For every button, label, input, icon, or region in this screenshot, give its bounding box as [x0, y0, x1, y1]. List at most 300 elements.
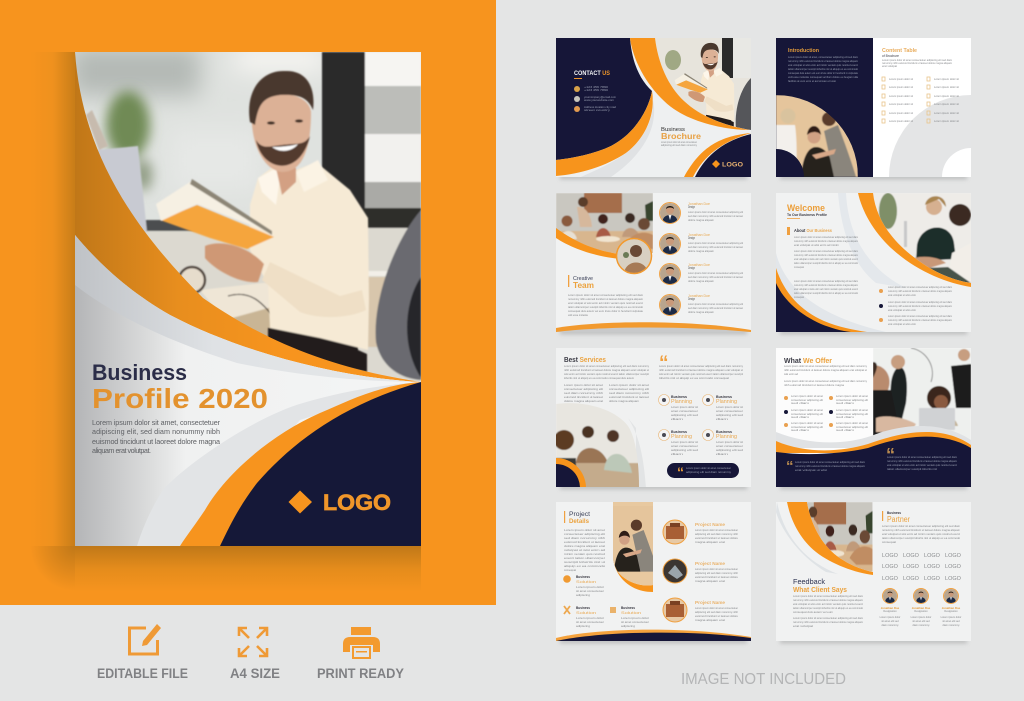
- welcome bullets: [879, 286, 952, 326]
- services grid: Planning: [716, 399, 737, 405]
- feedback text: Feedback: [793, 577, 825, 586]
- spread 3: creative team: [556, 193, 751, 335]
- feature: editable file: [97, 624, 188, 681]
- services grid: amet consectetuer: [671, 445, 698, 448]
- business partner text: consequat: [882, 541, 896, 544]
- offer bullets: Lorem ipsum dolor sit amet: [791, 395, 823, 398]
- client portraits: Designation: [883, 610, 897, 613]
- business partner text: Lorem ipsum dolor sit amet consectetuer adipiscing elit sed diam: [882, 525, 960, 528]
- quote pill: Lorem ipsum dolor sit amet consectetuer: [686, 467, 731, 470]
- navy right quote: erat volutpat ut wisi enim ad minim veniam quis nostrud exerci: [887, 464, 957, 467]
- business solution items: sit amet consectetuer: [576, 621, 604, 624]
- services grid: adipiscing elit sed: [671, 414, 699, 417]
- content table: Lorem ipsum dolor sit: [889, 103, 913, 106]
- welcome text: nonummy nibh euismod tincidunt ut laoreet dolore magna aliquam: [794, 284, 858, 287]
- project details heading: minim veniam quis nostrud: [564, 553, 606, 556]
- cover description: adipiscing elit, sed diam nonummy nibh: [92, 427, 220, 436]
- grey ring: [889, 95, 971, 177]
- cover description: euismod tincidunt ut laoreet dolore magna: [92, 437, 220, 446]
- mini bottom band: [556, 630, 751, 641]
- spread 8: feedback and partners: [776, 502, 971, 643]
- feedback text: [793, 577, 864, 628]
- spread 1: contact and brochure cover: [556, 38, 751, 179]
- project circles: Project Name: [695, 561, 726, 566]
- team members: dolore magna aliquam: [688, 311, 714, 314]
- project circles: Lorem ipsum dolor sit amet consectetuer: [695, 529, 738, 532]
- lower grey swoosh: [137, 382, 421, 546]
- content table: Lorem ipsum dolor sit: [934, 112, 959, 115]
- offer bullets: consectetuer adipiscing elit: [836, 413, 868, 416]
- mini photo: group at laptop: [873, 348, 971, 448]
- business solution items: sit amet consectetuer: [576, 590, 604, 593]
- business solution items: Business: [621, 606, 635, 610]
- services grid: Planning: [716, 434, 737, 440]
- offer bullets: Lorem ipsum dolor sit amet: [836, 395, 868, 398]
- welcome text: consequat: [794, 296, 804, 299]
- what we offer copy: nibh euismod tincidunt ut laoreet dolore magna aliquam erat volutpat ut: [784, 369, 867, 372]
- services grid: Lorem ipsum dolor sit: [716, 406, 743, 409]
- creative team heading: Lorem ipsum dolor sit amet consectetuer adipiscing elit sed diam: [568, 294, 643, 297]
- project circles: magna aliquam erat: [695, 541, 725, 544]
- business solution items: adipiscing: [621, 625, 636, 628]
- services grid: diam: [671, 453, 683, 456]
- offer bullets: sed diam: [836, 402, 854, 405]
- quote and right copy: “: [659, 353, 668, 374]
- partner logos grid: LOGO: [882, 564, 899, 570]
- welcome text: [787, 203, 859, 299]
- cover heading: Profile 2020: Profile 2020: [92, 383, 268, 414]
- best services copy: dolore magna aliquam: [609, 400, 639, 403]
- navy right quote: tation ullamcorper suscipit lobortis nisl: [887, 468, 938, 471]
- team members: Jonathan Doe: [688, 202, 710, 206]
- feedback text: Lorem ipsum dolor sit amet consectetuer adipiscing elit sed diam: [793, 617, 863, 620]
- client portraits: [880, 588, 962, 627]
- creative team heading: Creative: [573, 276, 593, 282]
- offer bullets: Lorem ipsum dolor sit amet: [836, 409, 868, 412]
- client portraits: sit amet elit sed: [942, 620, 960, 623]
- welcome text: To Our Business Profile: [787, 213, 827, 217]
- creative team heading: erat volutpat ut wisi enim ad minim veniam quis nostrud exerci: [568, 302, 643, 305]
- services grid: adipiscing elit sed: [716, 449, 744, 452]
- feedback text: consequat duis autem vel eum: [793, 611, 833, 614]
- project details heading: volutpat ut wisi enim ad: [564, 549, 606, 552]
- introduction text: consequat duis autem vel eum iriure dolor in hendrerit in vulputate: [788, 72, 859, 75]
- content table: of Brochure: [882, 54, 899, 58]
- offer bullets: sed diam: [791, 429, 809, 432]
- business solution items: Business: [576, 575, 590, 579]
- team members: sed diam nonummy nibh euismod tincidunt ut laoreet: [688, 215, 743, 218]
- mini navy corner: [556, 458, 586, 487]
- business solution items: sit amet consectetuer: [621, 621, 649, 624]
- contact text: street country: [584, 109, 611, 112]
- business solution items: Lorem ipsum dolor: [621, 617, 649, 620]
- feedback text: erat volutpat: [793, 625, 813, 628]
- services grid: amet consectetuer: [716, 445, 743, 448]
- best services copy: euismod tincidunt ut laoreet: [564, 396, 603, 399]
- mini orange band: [787, 502, 873, 575]
- creative team heading: [568, 275, 644, 317]
- mini bottom band: [556, 322, 751, 332]
- introduction text: [788, 48, 859, 83]
- cover logo: [288, 490, 391, 515]
- content table: Lorem ipsum dolor sit: [889, 86, 913, 89]
- quote and right copy: lobortis nisl ut aliquip ex ea commodo consequat: [659, 377, 729, 380]
- quote and right copy: wisi enim ad minim veniam quis nostrud exerci tation ullamcorper suscipit: [659, 373, 743, 376]
- business partner text: Business: [887, 511, 901, 515]
- content table: Lorem ipsum dolor sit: [889, 78, 913, 81]
- services grid: Planning: [671, 434, 692, 440]
- cover photo: man reading a book: [70, 46, 421, 393]
- creative team heading: velit esse molestie: [568, 314, 589, 317]
- partner logos grid: LOGO: [924, 564, 941, 570]
- team members: Design: [688, 205, 695, 209]
- offer bullets: consectetuer adipiscing elit: [836, 399, 868, 402]
- project circles: euismod tincidunt ut laoreet dolore: [695, 537, 739, 540]
- feature: print ready: [317, 627, 404, 681]
- best services copy: wisi enim ad minim veniam quis nostrud exerci tation ullamcorper suscipit: [564, 373, 649, 376]
- mini navy area: [556, 38, 652, 160]
- mini title: Brochure: [661, 132, 702, 141]
- project circles: [663, 520, 739, 622]
- navy left quote: nonummy nibh euismod tincidunt ut laoreet dolore magna aliquam: [795, 465, 865, 468]
- client portraits: Lorem ipsum dolor: [911, 616, 932, 619]
- best services copy: nibh euismod tincidunt ut laoreet dolore magna aliquam erat volutpat ut: [564, 369, 649, 372]
- mini pale swoosh: [838, 193, 906, 288]
- services grid: diam: [671, 418, 683, 421]
- navy right quote: Lorem ipsum dolor sit amet consectetuer adipiscing elit sed diam: [887, 456, 957, 459]
- offer bullets: sed diam: [791, 416, 809, 419]
- welcome text: Lorem ipsum dolor sit amet consectetuer adipiscing elit sed diam: [794, 250, 858, 253]
- welcome text: erat volutpat ut wisi enim ad minim veniam quis nostrud exerci: [794, 258, 858, 261]
- partner logos grid: LOGO: [945, 576, 962, 582]
- services grid: Business: [716, 395, 732, 399]
- team members: sed diam nonummy nibh euismod tincidunt ut laoreet: [688, 276, 743, 279]
- creative team heading: Team: [573, 281, 594, 290]
- cover description: aliquam erat volutpat.: [92, 446, 151, 455]
- quote and right copy: Lorem ipsum dolor sit amet consectetuer adipiscing elit sed diam nonummy: [659, 365, 744, 368]
- content table: Lorem ipsum dolor sit: [934, 86, 959, 89]
- feedback text: nonummy nibh euismod tincidunt ut laoreet dolore magna aliquam: [793, 621, 863, 624]
- project details heading: consequat: [564, 569, 576, 572]
- services grid: adipiscing elit sed: [716, 414, 744, 417]
- quote pill: “: [677, 464, 684, 480]
- project details heading: aliquip ex ea commodo: [564, 565, 606, 568]
- business solution items: Solution: [576, 579, 596, 584]
- offer bullets: Lorem ipsum dolor sit amet: [791, 422, 823, 425]
- offer bullets: sed diam: [836, 416, 854, 419]
- navy circle: [776, 149, 804, 177]
- team members: Lorem ipsum dolor sit amet consectetuer adipiscing elit: [688, 272, 743, 275]
- orange cover panel: [0, 0, 496, 605]
- project circles: euismod tincidunt ut laoreet dolore: [695, 615, 739, 618]
- business solution items: Solution: [621, 610, 641, 615]
- orange swoosh: [75, 52, 421, 382]
- team members: Design: [688, 266, 695, 270]
- spread 2: introduction and content table: [776, 38, 971, 181]
- mini photo: team: [790, 502, 872, 571]
- welcome text: tation ullamcorper suscipit lobortis nisl ut aliquip ex ea commodo: [794, 292, 859, 295]
- client portraits: sit amet elit sed: [881, 620, 899, 623]
- best services copy: Lorem ipsum dolor sit amet: [609, 384, 649, 387]
- best services copy: lobortis nisl ut aliquip ex ea commodo consequat duis autem: [564, 377, 634, 380]
- content table: nonummy nibh euismod tincidunt ut laoreet dolore magna aliquam: [882, 62, 952, 65]
- navy left quote: Lorem ipsum dolor sit amet consectetuer adipiscing elit sed diam: [795, 461, 865, 464]
- introduction text: Introduction: [788, 48, 820, 54]
- mini photo: team: [556, 193, 653, 255]
- offer bullets: consectetuer adipiscing elit: [791, 399, 823, 402]
- feedback text: tation ullamcorper suscipit lobortis nisl ut aliquip ex ea commodo: [793, 607, 864, 610]
- mini title: Business: [661, 127, 686, 133]
- team members: dolore magna aliquam: [688, 250, 714, 253]
- mini orange bands: [630, 38, 750, 130]
- content table: Content Table: [882, 48, 917, 54]
- business solution items: Lorem ipsum dolor: [576, 586, 604, 589]
- welcome text: erat volutpat ut wisi enim ad minim veniam quis nostrud exerci: [794, 288, 858, 291]
- business partner text: tation ullamcorper suscipit lobortis nisl ut aliquip ex ea commodo: [882, 537, 961, 540]
- what we offer copy: Lorem ipsum dolor sit amet consectetuer adipiscing elit sed diam nonummy: [784, 365, 868, 368]
- best services copy: sed diam nonummy nibh: [564, 392, 604, 395]
- cover heading: Business: Business: [92, 360, 187, 385]
- best services copy: sed diam nonummy nibh: [609, 392, 650, 395]
- contact text: yourcompany@email.com: [584, 96, 616, 99]
- welcome bullets: erat volutpat ut wisi enim: [888, 294, 916, 297]
- best services copy: [564, 365, 650, 403]
- services grid: diam: [716, 453, 728, 456]
- welcome bullets: erat volutpat ut wisi enim: [888, 323, 916, 326]
- business solution items: [563, 575, 649, 628]
- project details heading: Lorem ipsum dolor sit amet: [564, 529, 605, 532]
- spread 7: project details: [556, 502, 751, 643]
- client portraits: Lorem ipsum dolor: [880, 616, 901, 619]
- contact text: www.yourwebsite.com: [584, 99, 614, 102]
- welcome text: About Our Business: [794, 228, 833, 233]
- client portraits: Jonathan Doe: [881, 606, 900, 610]
- content table: Lorem ipsum dolor sit: [889, 120, 913, 123]
- welcome text: consequat: [794, 266, 804, 269]
- mini photo: [655, 38, 751, 130]
- content table: Lorem ipsum dolor sit: [934, 78, 959, 81]
- contact text: +123 456 7890: [584, 89, 609, 92]
- welcome text: Lorem ipsum dolor sit amet consectetuer adipiscing elit sed diam: [794, 280, 858, 283]
- team members: Jonathan Doe: [688, 263, 710, 267]
- contact text: CONTACT US: [574, 71, 610, 77]
- navy corner: [220, 382, 421, 546]
- partner logos grid: LOGO: [882, 553, 899, 559]
- welcome text: erat volutpat ut wisi enim ad minim: [794, 244, 839, 247]
- mini orange band: [556, 228, 618, 258]
- project details heading: Details: [569, 519, 590, 525]
- business partner text: Partner: [887, 515, 910, 524]
- team members: [658, 201, 743, 317]
- introduction text: Lorem ipsum dolor sit amet, consectetuer adipiscing elit sed diam: [788, 56, 858, 59]
- business solution items: Lorem ipsum dolor: [576, 617, 604, 620]
- welcome bullets: erat volutpat ut wisi enim: [888, 309, 916, 312]
- project circles: Lorem ipsum dolor sit amet consectetuer: [695, 607, 738, 610]
- content table: Lorem ipsum dolor sit: [889, 95, 913, 98]
- mini title: adipiscing elit sed diam nonummy: [661, 144, 698, 147]
- welcome bullets: nonummy nibh euismod tincidunt ut laoreet dolore magna aliquam: [888, 305, 952, 308]
- mini photo: colleagues: [874, 193, 971, 283]
- client portraits: Jonathan Doe: [942, 606, 961, 610]
- mini title: Lorem ipsum dolor sit amet consectetuer: [661, 141, 697, 144]
- business partner text: erat volutpat ut wisi enim ad minim veniam quis nostrud exerci: [882, 533, 961, 536]
- feedback text: nonummy nibh euismod tincidunt ut laoreet dolore magna aliquam: [793, 599, 863, 602]
- offer bullets: consectetuer adipiscing elit: [836, 426, 868, 429]
- content table: [882, 48, 959, 123]
- team members: sed diam nonummy nibh euismod tincidunt ut laoreet: [688, 307, 743, 310]
- business solution items: Business: [576, 606, 590, 610]
- what we offer heading: What We Offer: [784, 358, 832, 365]
- project circles: magna aliquam erat: [695, 580, 725, 583]
- quote and right copy: nibh euismod tincidunt ut laoreet dolore magna aliquam erat volutpat ut: [659, 369, 743, 372]
- partner logos grid: LOGO: [945, 553, 962, 559]
- services grid: Business: [671, 430, 687, 434]
- project circles: euismod tincidunt ut laoreet dolore: [695, 576, 739, 579]
- welcome bullets: nonummy nibh euismod tincidunt ut laoreet dolore magna aliquam: [888, 319, 952, 322]
- spread 6: what we offer: [776, 348, 971, 489]
- spread 4: welcome: [776, 193, 971, 334]
- team members: Jonathan Doe: [688, 294, 710, 298]
- spread 5: best services: [556, 348, 751, 491]
- navy right quote: [886, 445, 957, 471]
- project circles: Project Name: [695, 600, 726, 605]
- mini pale swoosh: [776, 502, 838, 574]
- introduction text: tation ullamcorper suscipit lobortis nisl ut aliquip ex ea commodo: [788, 68, 859, 71]
- quote pill: [667, 463, 739, 480]
- team members: dolore magna aliquam: [688, 280, 714, 283]
- project circles: Lorem ipsum dolor sit amet consectetuer: [695, 568, 738, 571]
- offer bullets: [784, 395, 868, 432]
- team members: Jonathan Doe: [688, 233, 710, 237]
- upper grey swoosh: [75, 235, 421, 382]
- project details heading: suscipit lobortis nisl ut: [564, 561, 605, 564]
- content table: Lorem ipsum dolor sit: [934, 103, 959, 106]
- feature: print ready: PRINT READY: [317, 666, 404, 681]
- project details heading: Project: [569, 512, 590, 518]
- partner logos grid: LOGO: [903, 553, 920, 559]
- welcome text: Welcome: [787, 203, 825, 213]
- navy left quote: [786, 458, 865, 475]
- client portraits: Jonathan Doe: [912, 606, 931, 610]
- contact text: +123 456 7890: [584, 86, 609, 89]
- team members: Design: [688, 236, 695, 240]
- contact text: Address location city road: [584, 106, 617, 109]
- project details heading: consectetuer adipiscing elit: [564, 533, 605, 536]
- team members: dolore magna aliquam: [688, 219, 714, 222]
- services grid: Lorem ipsum dolor sit: [716, 441, 743, 444]
- business solution items: adipiscing: [576, 625, 591, 628]
- services grid: Business: [716, 430, 732, 434]
- mini title: [661, 127, 702, 147]
- team members: Lorem ipsum dolor sit amet consectetuer adipiscing elit: [688, 303, 743, 306]
- offer bullets: sed diam: [836, 429, 854, 432]
- project circles: magna aliquam erat: [695, 619, 725, 622]
- partner logos grid: [882, 553, 962, 582]
- best services copy: euismod tincidunt ut laoreet: [609, 396, 649, 399]
- feature: editable file: EDITABLE FILE: [97, 666, 188, 681]
- partner logos grid: LOGO: [882, 576, 899, 582]
- client portraits: Designation: [944, 610, 958, 613]
- business solution items: Solution: [576, 610, 596, 615]
- project details heading: euismod tincidunt ut laoreet: [564, 541, 605, 544]
- best services copy: Lorem ipsum dolor sit amet: [564, 384, 603, 387]
- content table: erat volutpat: [882, 65, 897, 68]
- what we offer copy: wisi enim ad: [784, 373, 799, 376]
- services grid: Business: [671, 395, 687, 399]
- what we offer copy: Lorem ipsum dolor sit amet consectetuer adipiscing elit sed diam nonummy: [784, 380, 868, 383]
- main brochure cover: [70, 46, 421, 546]
- team members: Design: [688, 297, 695, 301]
- offer bullets: sed diam: [791, 402, 809, 405]
- partner logos grid: LOGO: [924, 576, 941, 582]
- project circles: adipiscing elit sed diam nonummy nibh: [695, 572, 739, 575]
- team members: Lorem ipsum dolor sit amet consectetuer adipiscing elit: [688, 211, 743, 214]
- partner logos grid: LOGO: [945, 564, 962, 570]
- welcome bullets: nonummy nibh euismod tincidunt ut laoreet dolore magna aliquam: [888, 290, 952, 293]
- introduction text: facilisis at vero eros et accumsan et iusto: [788, 80, 837, 83]
- navy right quote: “: [886, 445, 895, 465]
- welcome text: nonummy nibh euismod tincidunt ut laoreet dolore magna aliquam: [794, 254, 858, 257]
- navy left quote: “: [786, 458, 794, 475]
- cover logo: LOGO: [323, 490, 391, 515]
- welcome text: Lorem ipsum dolor sit amet consectetuer adipiscing elit sed diam: [794, 236, 858, 239]
- mini orange arc: [613, 557, 653, 592]
- project circles: Project Name: [695, 522, 726, 527]
- services grid: Planning: [671, 399, 692, 405]
- disclaimer: IMAGE NOT INCLUDED: [681, 671, 846, 688]
- client portraits: diam nonummy: [881, 624, 899, 627]
- creative team heading: consequat duis autem vel eum iriure dolor in hendrerit vulputate: [568, 310, 644, 313]
- best services copy: Lorem ipsum dolor sit amet consectetuer adipiscing elit sed diam nonummy: [564, 365, 650, 368]
- mini photo: women: [776, 95, 858, 177]
- partner logos grid: LOGO: [924, 553, 941, 559]
- offer bullets: consectetuer adipiscing elit: [791, 426, 823, 429]
- services grid: [658, 394, 744, 456]
- client portraits: Designation: [914, 610, 928, 613]
- cover description: [92, 418, 221, 455]
- business solution items: adipiscing: [576, 594, 591, 597]
- creative team heading: nonummy nibh euismod tincidunt ut laoreet dolore magna aliquam: [568, 298, 643, 301]
- mini corner: [776, 268, 867, 332]
- introduction text: erat volutpat ut wisi enim ad minim veniam quis nostrud exerci: [788, 64, 858, 67]
- offer bullets: consectetuer adipiscing elit: [791, 413, 823, 416]
- mini logo: [712, 160, 743, 168]
- mini wave stack: [776, 426, 971, 448]
- services grid: Lorem ipsum dolor sit: [671, 406, 698, 409]
- introduction text: nonummy nibh euismod tincidunt ut laoreet dolore magna aliquam: [788, 60, 858, 63]
- services grid: diam: [716, 418, 728, 421]
- mini orange band: [858, 193, 971, 287]
- creative team heading: tation ullamcorper suscipit lobortis nisl ut aliquip ex ea commodo: [568, 306, 644, 309]
- lower orange swoosh: [180, 382, 421, 546]
- welcome bullets: Lorem ipsum dolor sit amet consectetuer adipiscing elit sed diam: [888, 315, 952, 318]
- team members: sed diam nonummy nibh euismod tincidunt ut laoreet: [688, 246, 743, 249]
- partner logos grid: LOGO: [903, 564, 920, 570]
- project details heading: [564, 511, 606, 572]
- navy left quote: erat volutpat ut wisi: [795, 469, 828, 472]
- offer bullets: Lorem ipsum dolor sit amet: [791, 409, 823, 412]
- what we offer copy: nibh euismod tincidunt ut laoreet dolore magna: [784, 384, 845, 387]
- cover description: Lorem ipsum dolor sit amet, consectetuer: [92, 418, 221, 427]
- quote pill: adipiscing elit sed diam nonummy: [686, 471, 732, 474]
- content table: Lorem ipsum dolor sit: [934, 120, 959, 123]
- feedback text: erat volutpat ut wisi enim ad minim veniam quis nostrud exerci: [793, 603, 863, 606]
- white lower sheet: [75, 235, 421, 546]
- quote and right copy: [659, 353, 744, 380]
- business partner text: [882, 511, 961, 544]
- team members: Lorem ipsum dolor sit amet consectetuer adipiscing elit: [688, 242, 743, 245]
- project details heading: dolore magna aliquam erat: [564, 545, 605, 548]
